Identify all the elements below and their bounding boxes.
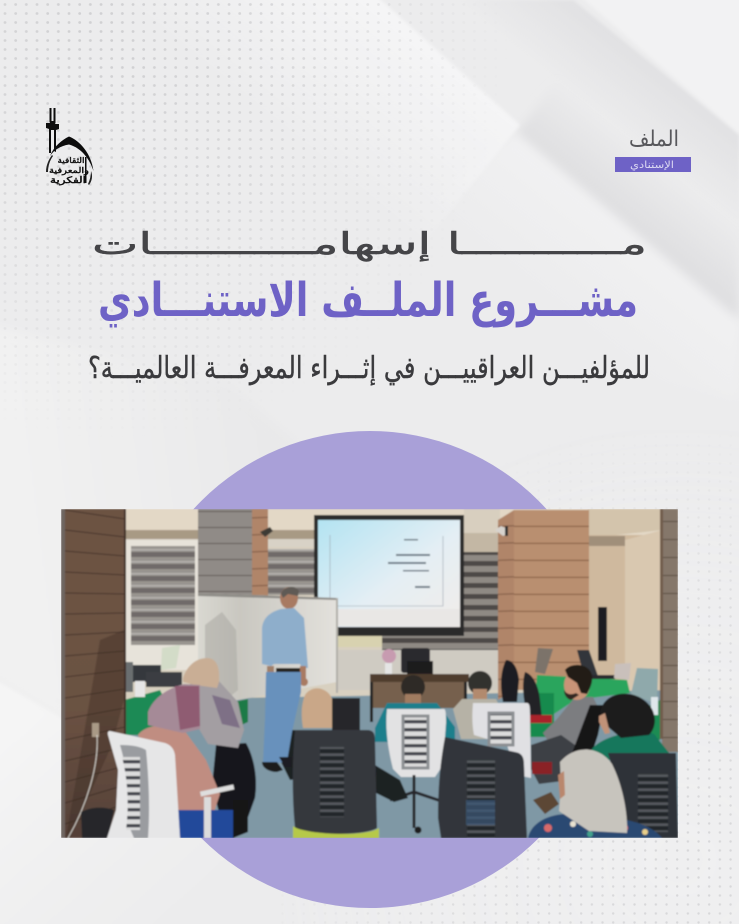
teacher standing	[262, 587, 308, 772]
classroom photo	[61, 509, 678, 838]
teacher shirt	[262, 608, 308, 668]
room base	[124, 546, 524, 700]
grey pillar	[198, 509, 252, 599]
logo: minaret and dome calligraphy: الثقافية	[58, 156, 84, 165]
logo: minaret and dome calligraphy	[46, 108, 94, 186]
pink scarf woman	[138, 684, 248, 838]
logo: minaret and dome calligraphy: والمعرفية	[49, 166, 89, 175]
green desks left	[124, 690, 165, 735]
green top woman with black hijab	[588, 694, 670, 760]
security camera right	[495, 526, 508, 536]
window blinds left	[126, 540, 198, 670]
man with beard	[531, 665, 597, 814]
tag word: الملف	[629, 127, 679, 152]
shoes	[262, 762, 283, 772]
woman in black, front centre	[280, 688, 408, 802]
window blinds right	[464, 552, 499, 649]
dark chair behind man	[572, 705, 604, 753]
title line 1: مـــــــــــا إسهامـــــــــــات	[92, 227, 647, 262]
man in beige seated	[453, 671, 499, 739]
teacher desk and chair	[401, 648, 430, 673]
right wooden pillar	[498, 510, 514, 700]
laptops	[535, 648, 553, 674]
black chairs right row	[501, 660, 519, 702]
window blinds middle	[267, 549, 314, 595]
green desks right	[535, 675, 630, 720]
waste bin	[81, 808, 114, 838]
dark chair far right	[608, 753, 678, 838]
teacher hands	[270, 684, 278, 692]
grey hijab woman front right	[528, 749, 662, 838]
speaker on wall	[598, 607, 607, 661]
teacher head	[280, 587, 298, 609]
title block	[88, 227, 650, 386]
empty chairs back right	[614, 663, 631, 680]
white chair front left	[107, 731, 234, 838]
jeans	[263, 672, 301, 764]
purple circle behind photo	[132, 431, 608, 908]
dark chair front centre	[293, 730, 379, 838]
section tag: file name	[615, 127, 691, 172]
back wall lower	[337, 650, 499, 690]
far right grey pillar	[662, 509, 678, 752]
tan hijab woman with floral top	[183, 658, 256, 820]
white office chair centre right	[472, 703, 531, 778]
tag ribbon	[615, 157, 691, 172]
belt	[276, 668, 302, 672]
whiteboard	[198, 593, 337, 702]
wall socket and cable	[68, 723, 99, 838]
white office chair centre left	[386, 709, 446, 834]
floor	[126, 690, 678, 838]
logo: minaret and dome calligraphy: الفكرية	[50, 176, 86, 186]
man in teal seated	[375, 675, 455, 742]
left wooden pillar	[61, 509, 126, 838]
dark chair lower right centre	[438, 737, 527, 838]
security camera left	[260, 527, 273, 537]
projector screen	[314, 515, 464, 636]
ribbon label: الإستنادي	[630, 160, 674, 171]
